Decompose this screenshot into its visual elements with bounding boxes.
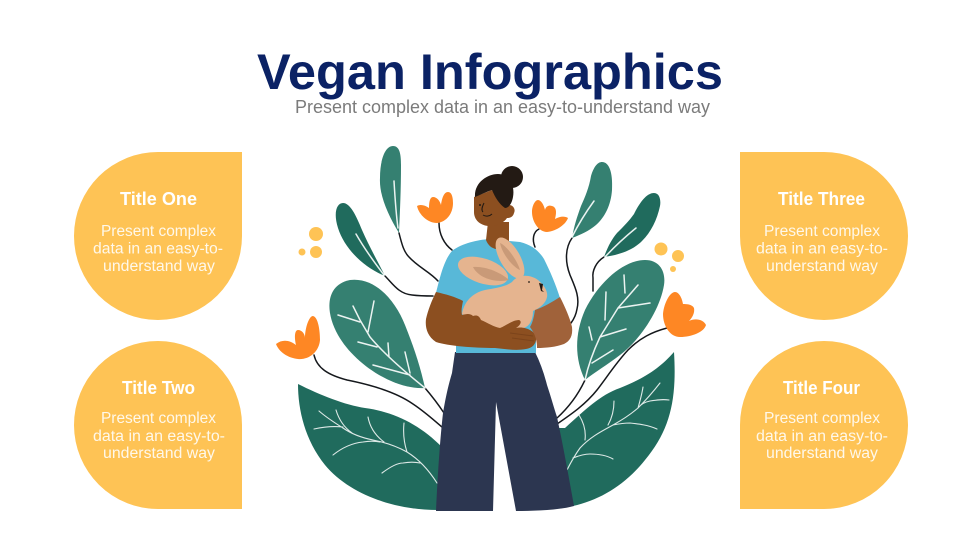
panel: title two bbox=[74, 341, 242, 509]
flower: top left bbox=[417, 192, 453, 223]
person bbox=[426, 166, 574, 511]
text block: title four: Present complex bbox=[764, 410, 880, 427]
rabbit face bbox=[528, 281, 544, 292]
text block: title three: Present complex bbox=[764, 223, 880, 240]
title: Vegan Infographics bbox=[257, 44, 723, 100]
text block: title two: data in an easy-to- bbox=[93, 428, 225, 445]
text block: title one bbox=[93, 223, 223, 275]
text block: title four: data in an easy-to- bbox=[756, 428, 888, 445]
text block: title one: Present complex bbox=[101, 223, 216, 240]
rabbit bbox=[454, 233, 547, 330]
heading: title one: Title One bbox=[120, 189, 197, 209]
rabbit inner ears bbox=[473, 243, 520, 281]
face bbox=[474, 190, 515, 226]
plant stems bbox=[314, 223, 667, 428]
heading: title two: Title Two bbox=[122, 378, 195, 398]
leaf: bottom left bbox=[298, 384, 442, 510]
leaf: upper right bbox=[572, 162, 612, 238]
leaf: right large bbox=[577, 260, 664, 380]
illustration: plants and person bbox=[276, 146, 706, 511]
text block: title one: data in an easy-to- bbox=[93, 240, 223, 258]
flower: left bbox=[276, 316, 320, 359]
panel: title four bbox=[740, 341, 908, 509]
right arm bbox=[530, 297, 572, 348]
subtitle: Present complex data in an easy-to-understand way bbox=[295, 97, 710, 117]
rabbit left ear bbox=[454, 251, 512, 291]
text block: title two: Present complex bbox=[101, 410, 216, 427]
leaf: left large bbox=[329, 280, 425, 388]
neck bbox=[486, 222, 509, 249]
leaf: bottom right bbox=[558, 352, 675, 506]
hand fingers bbox=[510, 333, 534, 341]
heading: title four: Title Four bbox=[783, 378, 860, 398]
text block: title four bbox=[756, 410, 888, 462]
leaf: left narrow bbox=[336, 203, 385, 276]
text block: title three: understand way bbox=[766, 258, 878, 275]
rabbit right ear bbox=[490, 233, 530, 283]
flower: right bbox=[663, 292, 706, 337]
text block: title two bbox=[93, 410, 225, 462]
rabbit body bbox=[462, 276, 547, 330]
text block: title three: data in an easy-to- bbox=[756, 240, 888, 258]
text block: title three bbox=[756, 223, 888, 275]
text block: title two: understand way bbox=[103, 445, 215, 462]
dots: left bbox=[298, 227, 323, 258]
dots: right bbox=[654, 242, 684, 272]
panel: title one bbox=[74, 152, 242, 320]
left arm and hand bbox=[426, 292, 536, 350]
hair and bun bbox=[475, 166, 523, 208]
pants bbox=[436, 352, 574, 511]
shirt bbox=[436, 239, 560, 353]
flower: top right bbox=[532, 200, 568, 232]
text block: title four: understand way bbox=[766, 445, 878, 462]
text block: title one: understand way bbox=[103, 258, 215, 275]
leaf: top left narrow bbox=[380, 146, 401, 233]
panel: title three bbox=[740, 152, 908, 320]
leaf: right narrow bbox=[604, 193, 660, 257]
heading: title three: Title Three bbox=[778, 189, 865, 209]
face details bbox=[480, 203, 492, 216]
